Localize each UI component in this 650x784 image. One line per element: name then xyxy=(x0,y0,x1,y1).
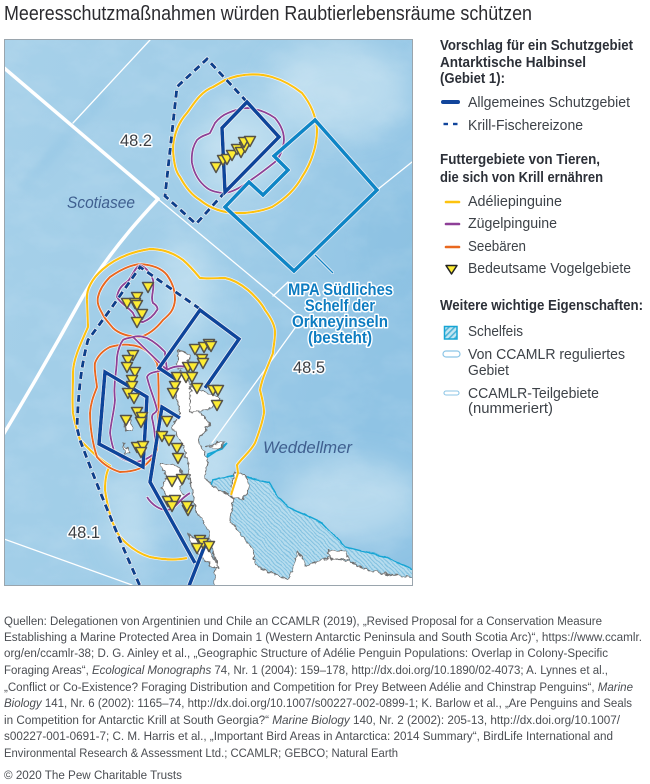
CCAMLR boundaries xyxy=(3,40,412,585)
MPA label xyxy=(288,281,393,347)
legend heading: foraging areas: Futtergebiete von Tieren, xyxy=(440,152,600,168)
legend heading: foraging areas: die sich von Krill ernähren xyxy=(440,170,603,186)
map panel xyxy=(3,39,425,590)
sea label: Scotiasee: Scotiasee xyxy=(67,193,135,212)
subarea label 48.1: 48.1 xyxy=(68,524,100,542)
sources: in Competition for Antarctic Krill at South Georgia?“ Marine Biology 140, Nr. 2 (2002): 205-13, http://dx.doi.org/10.1007/ xyxy=(4,713,621,727)
legend item: CCAMLR regulated area: Von CCAMLR reguliertes xyxy=(468,347,625,363)
legend item: CCAMLR subareas xyxy=(444,386,599,417)
general protection zones xyxy=(99,102,279,586)
MPA label: (besteht) xyxy=(308,329,372,347)
sources: Environmental Research & Assessment Ltd.; CCAMLR; GEBCO; Natural Earth xyxy=(4,746,398,760)
ice shelf xyxy=(210,474,412,579)
legend item: fur seals: Seebären xyxy=(468,239,526,255)
cyan ice near peninsula xyxy=(206,442,228,458)
sea label: Weddellmeer: Weddellmer xyxy=(263,438,353,457)
sources: s00227-001-0691-7; C. M. Harris et al., „Important Bird Areas in Antarctica: 2014 Summary“, BirdLife International and xyxy=(4,729,613,743)
legend item: fur seals xyxy=(446,239,526,255)
legend heading: proposal: Vorschlag für ein Schutzgebiet xyxy=(440,38,633,54)
foraging range: chinstrap penguins xyxy=(110,108,284,510)
legend heading: proposal: Antarktische Halbinsel xyxy=(440,55,586,71)
foraging range: fur seals xyxy=(90,264,175,472)
legend xyxy=(440,38,643,417)
sources xyxy=(4,614,642,760)
subarea label 48.2: 48.2 xyxy=(120,132,152,150)
legend item: CCAMLR subareas: (nummeriert) xyxy=(468,401,553,417)
legend item: general protection zone: Allgemeines Schutzgebiet xyxy=(468,95,630,111)
foraging range: Adélie penguins xyxy=(73,74,317,559)
sources: org/en/ccamlr-38; D. G. Ainley et al., „Geographic Structure of Adélie Penguin Populations: Overlap in Colony-Specific xyxy=(4,646,608,660)
copyright: © 2020 The Pew Charitable Trusts xyxy=(4,768,182,782)
sources: Quellen: Delegationen von Argentinien und Chile an CCAMLR (2019), „Revised Proposal for a Conservation Measure xyxy=(4,614,602,628)
legend heading: proposal xyxy=(440,38,633,87)
legend item: Adélie penguins: Adéliepinguine xyxy=(468,194,562,210)
legend item: ice shelf xyxy=(444,324,523,340)
subarea label 48.5: 48.5 xyxy=(293,359,325,377)
sources: „Conflict or Co-Existence? Foraging Distribution and Competition for Prey Between Adélie and Chinstrap Penguins“, Marine xyxy=(4,680,633,694)
legend item: krill fishing zone: Krill-Fischereizone xyxy=(468,118,583,134)
map border xyxy=(4,40,412,586)
existing MPA: South Orkney Islands xyxy=(225,120,377,273)
important bird areas xyxy=(120,136,256,554)
MPA label: Orkneyinseln xyxy=(292,313,388,331)
title: Meeresschutzmaßnahmen würden Raubtierlebensräume schützen xyxy=(4,3,532,25)
legend item: CCAMLR regulated area: Gebiet xyxy=(468,363,509,379)
legend item: important bird areas: Bedeutsame Vogelgebiete xyxy=(468,261,631,277)
MPA label: MPA Südliches xyxy=(288,281,393,299)
legend item: ice shelf: Schelfeis xyxy=(468,324,523,340)
krill fishing zones xyxy=(77,59,247,586)
sources: Foraging Areas“, Ecological Monographs 74, Nr. 1 (2004): 159–178, http://dx.doi.org/10.1890/02-4073; A. Lynnes et al., xyxy=(4,663,608,677)
legend item: CCAMLR regulated area xyxy=(443,347,625,379)
legend item: CCAMLR subareas: CCAMLR-Teilgebiete xyxy=(468,386,599,402)
land: Antarctic Peninsula xyxy=(123,350,414,590)
legend item: chinstrap penguins: Zügelpinguine xyxy=(468,216,557,232)
legend heading: proposal: (Gebiet 1): xyxy=(440,71,505,87)
legend heading: foraging areas xyxy=(440,152,603,186)
MPA label: Schelf der xyxy=(305,297,376,315)
